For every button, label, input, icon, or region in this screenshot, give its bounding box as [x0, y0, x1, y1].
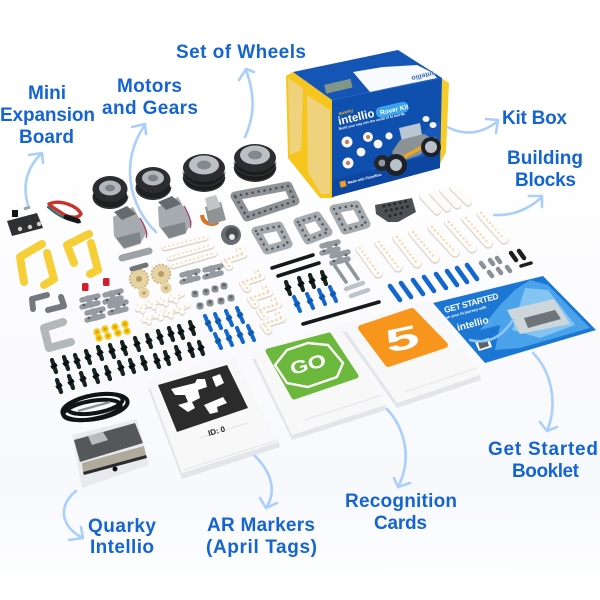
- label: Quarky Intellio: Intellio: [90, 537, 154, 558]
- label: Motors and Gears: [102, 76, 198, 119]
- arrow: mini expansion board: [26, 153, 43, 205]
- small grey and black pins: [481, 251, 531, 276]
- kit box: intellio: [411, 69, 434, 81]
- white L bricks: [225, 248, 282, 331]
- label: Motors and Gears: Motors: [117, 76, 182, 97]
- USB cable: [60, 389, 130, 425]
- label: Mini Expansion Board: Expansion: [0, 105, 95, 126]
- booklet brand: intellio: [456, 315, 490, 334]
- rover illustration: [374, 123, 441, 176]
- booklet QR: [475, 338, 492, 351]
- box right strip: [437, 78, 449, 170]
- label: Kit Box: Kit Box: [502, 108, 567, 129]
- ball caster: [221, 225, 241, 245]
- light grey C beam: [44, 322, 71, 348]
- GO octagon: [275, 343, 343, 387]
- wheel 2: [136, 167, 171, 200]
- mini expansion board: [7, 207, 43, 236]
- label: Motors and Gears: and Gears: [102, 98, 198, 119]
- motor 1: [113, 206, 147, 249]
- label: Get Started Booklet: Get Started: [488, 439, 598, 460]
- label: Mini Expansion Board: Mini: [28, 83, 66, 104]
- red and black cable: [48, 202, 81, 222]
- blue pins: [205, 308, 254, 348]
- number 5: 5: [382, 318, 423, 360]
- grey H connectors right: [182, 266, 221, 282]
- GO card: [252, 323, 386, 440]
- box Rover Kit pill: [375, 101, 410, 119]
- white small connectors: [138, 294, 188, 323]
- box front face: [332, 78, 442, 197]
- box feature icons: [342, 116, 436, 168]
- label: Quarky Intellio: Quarky: [88, 516, 156, 537]
- booklet title: GET STARTED: [443, 291, 500, 315]
- arrow: kit box: [447, 119, 498, 133]
- label: Building Blocks: Blocks: [515, 170, 576, 191]
- wheel 4: [234, 144, 276, 182]
- grey H connectors left: [82, 291, 126, 320]
- label: Get Started Booklet: [488, 439, 598, 482]
- yellow arches: [20, 234, 98, 285]
- gears: [130, 264, 172, 298]
- box footer logo: [339, 180, 347, 188]
- label: AR Markers (April Tags): (April Tags): [206, 537, 317, 558]
- arrow: wheels: [239, 69, 254, 137]
- label: Mini Expansion Board: Board: [19, 127, 74, 148]
- white beams left of centre: [165, 237, 214, 266]
- arrow: motors: [130, 124, 156, 232]
- get started booklet: [433, 276, 596, 363]
- frame 3: [298, 216, 328, 240]
- black rods: [272, 255, 379, 324]
- quarky intellio device: [72, 419, 149, 488]
- wheel 1: [92, 176, 128, 209]
- kit box: intellio: [337, 108, 376, 128]
- arrow: quarky intellio: [64, 491, 83, 540]
- frames: [235, 186, 366, 250]
- label: Get Started Booklet: Booklet: [512, 461, 580, 482]
- AR marker card: [148, 355, 280, 479]
- arrow: building blocks: [494, 196, 542, 215]
- label: AR Markers (April Tags): AR Markers: [207, 515, 315, 536]
- frame 1: [235, 186, 295, 217]
- label: Building Blocks: [507, 148, 583, 191]
- booklet subtitle: on your AI journey with: [445, 305, 488, 320]
- booklet device: [507, 299, 570, 334]
- wheel 3: [183, 154, 225, 192]
- orange square: [361, 311, 445, 364]
- dark perforated brick: [375, 198, 416, 222]
- label: Building Blocks: Building: [507, 148, 583, 169]
- arrow: get started booklet: [533, 353, 557, 431]
- box tagline: Build your way into the world of AI and ML: [338, 112, 406, 131]
- box brand text: quarky: [338, 108, 354, 116]
- 5 card: [342, 300, 481, 408]
- label: Recognition Cards: Cards: [374, 513, 427, 534]
- kit box: [286, 50, 449, 198]
- booklet inner arrow: [470, 320, 513, 341]
- motor 2: [158, 196, 192, 239]
- GO green square: [268, 335, 356, 397]
- label: Quarky Intellio: [88, 516, 156, 558]
- arrow: AR markers: [253, 454, 277, 508]
- grey bushings: [192, 282, 234, 310]
- box footer text: Made with PictoBlox: [347, 173, 382, 185]
- grey L pieces: [32, 295, 64, 310]
- AR black tag: [158, 365, 248, 432]
- grey axles: [335, 263, 368, 296]
- white long beams: [360, 213, 504, 274]
- grey beams: [122, 251, 149, 269]
- long blue rods: [390, 265, 477, 300]
- frame 4: [334, 205, 366, 230]
- arrow: recognition cards: [387, 409, 410, 487]
- AR card ID text: ID: 0: [207, 424, 227, 438]
- GO text: GO: [288, 351, 328, 379]
- short black and blue pins: [286, 272, 336, 311]
- label: AR Markers (April Tags): [206, 515, 317, 558]
- AR white pattern: [171, 374, 227, 414]
- black pins rows: [52, 322, 203, 392]
- box yellow left side: [286, 72, 334, 198]
- label: Set of Wheels: Set of Wheels: [176, 42, 306, 63]
- white short beams: [423, 187, 468, 212]
- label: Recognition Cards: Recognition: [345, 491, 457, 512]
- frame 2: [256, 226, 288, 250]
- grey angled connectors: [322, 242, 348, 263]
- box top face: [293, 50, 442, 100]
- wheels: [92, 144, 276, 209]
- yellow bushes: [93, 320, 131, 342]
- red bushes: [82, 278, 110, 291]
- label: Mini Expansion Board: [0, 83, 95, 148]
- box Rover Kit pill: Rover Kit: [379, 103, 410, 117]
- label: Recognition Cards: [345, 491, 457, 534]
- servo: [202, 195, 226, 225]
